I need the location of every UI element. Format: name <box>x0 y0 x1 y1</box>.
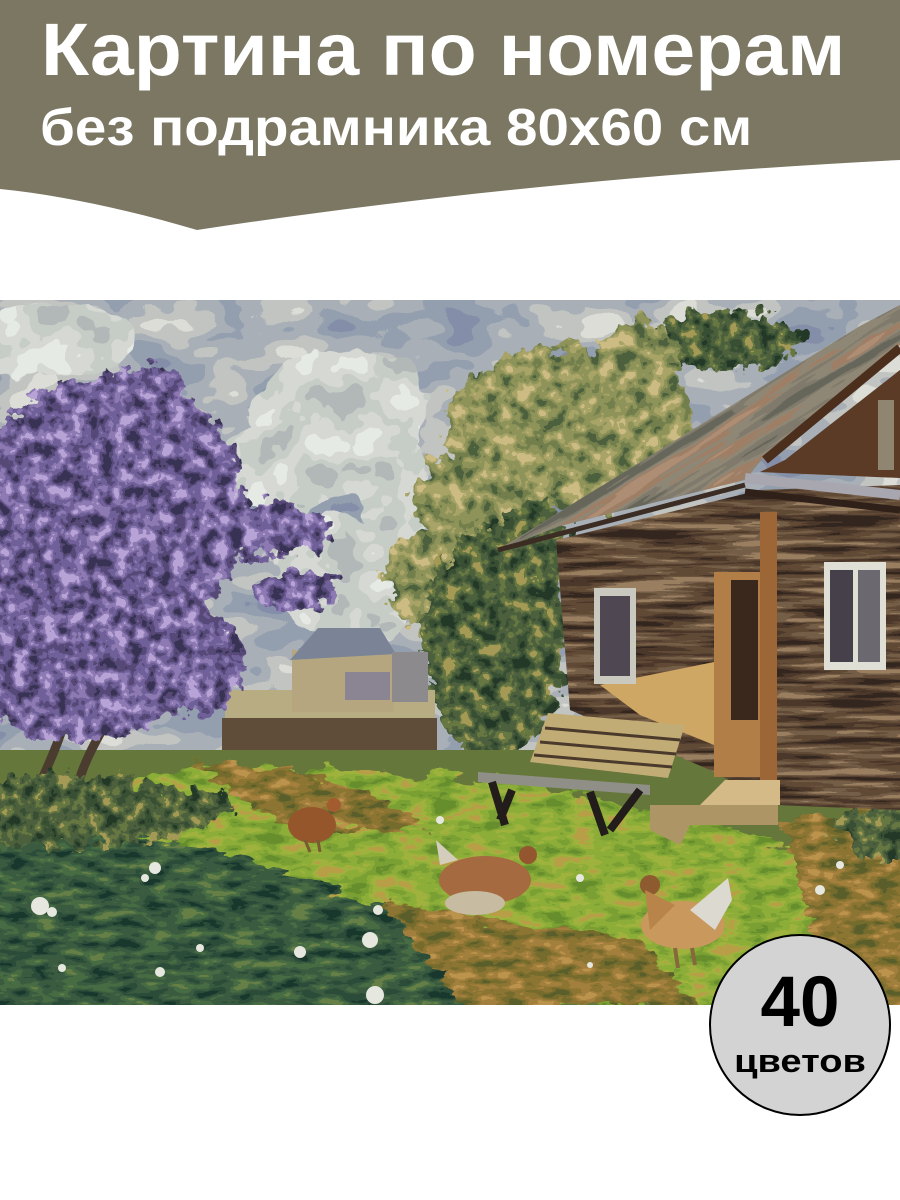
badge label: цветов <box>734 1043 866 1079</box>
lilac bush <box>0 365 340 846</box>
wooden house <box>497 305 900 845</box>
distant house and fence <box>222 628 437 760</box>
background tree <box>385 310 800 755</box>
meadow <box>0 750 900 1020</box>
painting: village house with lilac bush and chickens <box>0 300 900 1005</box>
roof <box>506 305 900 546</box>
bench <box>478 713 685 835</box>
stone foundation and steps <box>650 805 778 845</box>
gable wall <box>760 370 900 478</box>
subtitle: без подрамника 80х60 см <box>40 99 752 157</box>
badge number: 40 <box>760 963 839 1042</box>
porch post and door <box>760 512 777 797</box>
chicken 1 <box>288 798 341 852</box>
chicken 3 <box>640 875 732 968</box>
white flowers <box>31 816 844 1004</box>
chicken 2 <box>436 840 537 915</box>
sky <box>0 300 900 760</box>
left window <box>594 588 636 684</box>
header banner <box>0 0 900 230</box>
right window <box>824 562 886 670</box>
badge: 40 colours <box>709 934 891 1116</box>
title: Картина по номерам <box>41 8 845 91</box>
